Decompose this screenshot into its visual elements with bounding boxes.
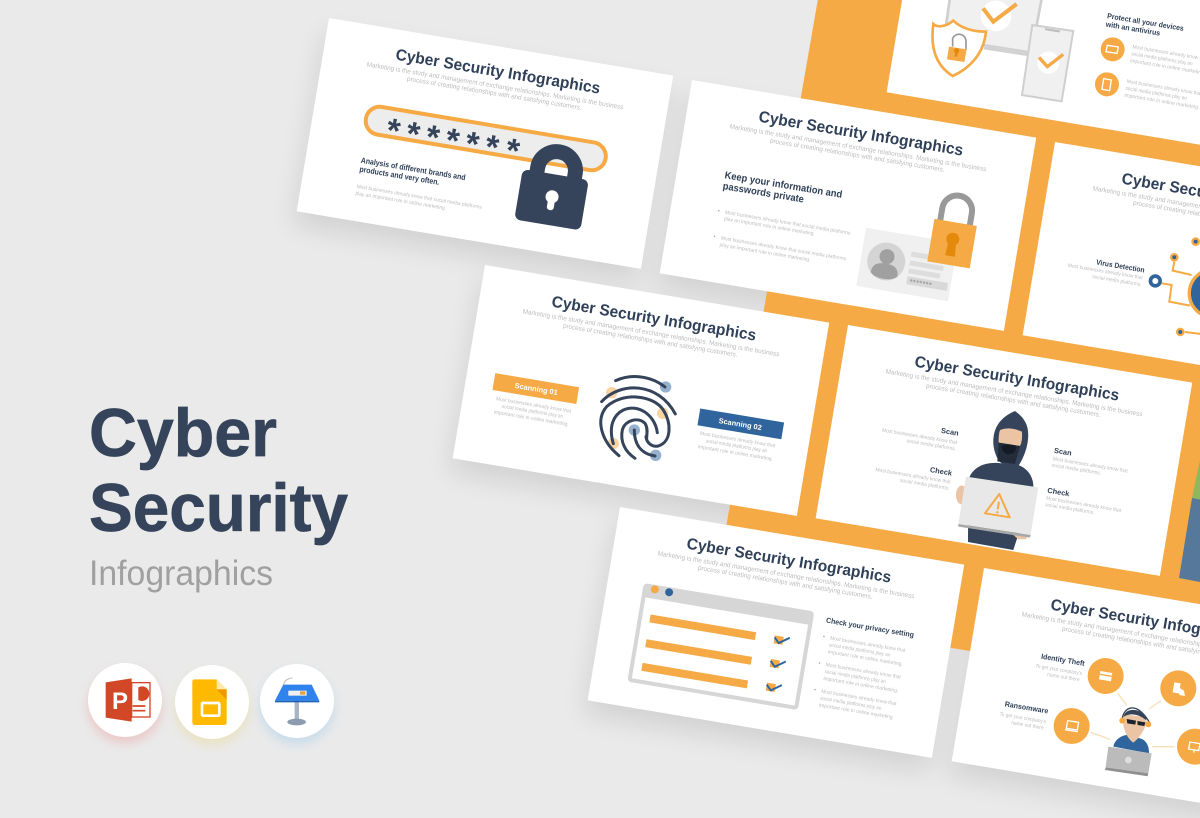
bullet list: Most businesses already know that — [830, 636, 906, 654]
text: ransomware: name out there. — [1011, 720, 1045, 732]
text: check right: Check — [1047, 486, 1071, 498]
bullet list: social media platforms play an — [820, 696, 882, 712]
text block: analysis — [355, 156, 487, 218]
diagram: threat circles around hacker — [1054, 658, 1200, 776]
text: identity theft — [1034, 651, 1086, 684]
icon: PowerPoint — [106, 678, 150, 722]
text: scan left — [880, 416, 960, 453]
icons: check marks — [766, 635, 790, 693]
icon: phone in hand — [1160, 670, 1196, 706]
text: scanning 02: important role in online marketing. — [697, 444, 773, 463]
icon: ID card — [856, 228, 958, 301]
password asterisks: * — [384, 111, 404, 151]
text: scan right: Most businesses already know that — [1052, 456, 1129, 475]
text: check left: Most businesses already know that — [875, 467, 951, 486]
text: check left: Check — [929, 465, 954, 478]
icon: monitor, phone and shield — [932, 0, 1073, 101]
bullet list: Most businesses already know that — [821, 689, 897, 707]
subtitle: process of creating relationships with and satisfying customers. — [406, 76, 582, 112]
browser window — [627, 583, 814, 710]
subtitle: Marketing is the study and management of exchange relationships. Marketing is the business — [657, 550, 915, 600]
text: scanning 02 — [697, 431, 776, 463]
icon: fingerprint — [601, 377, 675, 461]
text: scan right: Scan — [1053, 446, 1073, 458]
text: scanning 02: Most businesses already know that — [700, 431, 776, 449]
title: Cyber Security Infographics — [685, 536, 892, 587]
subtitle: process of creating relationships with and satisfying customers. — [925, 383, 1101, 419]
text: phone protection: social media platforms play an — [1125, 86, 1187, 102]
subtitle: Marketing is the study and management of exchange relationships. Marketing is the business — [366, 61, 624, 111]
text block: analysis: Analysis of different brands and — [360, 156, 466, 182]
text: phone protection: important role in online marketing. — [1124, 93, 1200, 111]
password asterisks: * — [443, 121, 463, 161]
heading: Cyber Security Infographics: Infographics — [89, 554, 273, 593]
heading: privacy setting: Check your privacy setting — [825, 616, 915, 639]
subtitle: Marketing is the study and management of exchange relationships. Marketing is the business — [729, 123, 987, 173]
heading: protect devices: with an antivirus — [1104, 19, 1161, 38]
text: check right: social media platforms. — [1045, 502, 1095, 516]
password asterisks: * — [503, 131, 523, 171]
icon: laptop — [1054, 708, 1090, 744]
slide: hacker — [816, 325, 1192, 576]
partial slide: photo at right edge — [1179, 460, 1200, 582]
icon: monitor — [1177, 729, 1200, 765]
text: scanning 01: important role in online marketing. — [493, 410, 569, 428]
text: laptop protection — [1130, 44, 1200, 77]
heading: Cyber Security Infographics: Security — [89, 470, 348, 546]
illustration: hooded hacker with laptop — [956, 411, 1038, 550]
icon: circuit diagram — [1149, 237, 1200, 336]
bullet list: important role in online marketing. — [827, 649, 903, 668]
label: scanning 02: Scanning 02 — [718, 416, 762, 432]
bullet list — [712, 209, 851, 269]
heading: keep private: passwords private — [722, 181, 805, 206]
illustration: hacker at laptop — [1105, 708, 1152, 776]
text: scanning 02: social media platforms play an — [705, 438, 768, 455]
text: scan left: Scan — [940, 426, 960, 438]
text: laptop protection: social media platforms play an — [1131, 51, 1193, 67]
text: identity theft: To get your company's — [1035, 663, 1083, 677]
text: scan right: social media platforms. — [1051, 463, 1101, 477]
text block: analysis: products and very often. — [359, 165, 440, 187]
text: scan left: social media platforms. — [906, 438, 956, 452]
bullet list: play an important role in online marketing. — [723, 216, 815, 237]
text: virus detection: Virus Detection — [1096, 258, 1146, 275]
heading: protect devices — [1104, 11, 1185, 41]
bullet list: important role in online marketing. — [823, 676, 899, 694]
bullet list: important role in online marketing. — [818, 703, 894, 721]
subtitle: process of creating relationships with and satisfying customers. — [562, 323, 738, 359]
icons: device circles — [1095, 37, 1125, 96]
icon: Keynote — [275, 678, 319, 725]
password asterisks: * — [403, 115, 423, 154]
password asterisks: * — [482, 128, 502, 168]
text: scanning 01: social media platforms play an — [501, 404, 564, 420]
text block: analysis: play an important role in online marketing. — [355, 191, 447, 212]
text: scan right — [1051, 446, 1130, 481]
slide: password lock — [297, 18, 673, 269]
subtitle: process of creating relationships with and satisfying customers. — [769, 138, 945, 174]
subtitle: Marketing is the study and management of exchange relationships. Marketing is the business — [522, 308, 780, 358]
bullet list: Most businesses already know that social media platforms — [720, 235, 847, 262]
title: Cyber Security Infographics — [394, 47, 601, 98]
label: scanning 01 — [492, 373, 579, 404]
text: ransomware — [998, 699, 1049, 732]
text: virus detection — [1066, 253, 1146, 288]
password asterisks — [384, 111, 523, 171]
title: Cyber Security Infographics — [550, 294, 757, 345]
bullet list — [811, 634, 906, 721]
text: check right: Most businesses already know that — [1046, 496, 1122, 514]
heading: protect devices: Protect all your devices — [1107, 11, 1185, 33]
icon: PowerPoint: P — [112, 688, 128, 715]
heading: keep private: Keep your information and — [724, 170, 843, 201]
slide: keep information private — [660, 80, 1036, 331]
text: virus detection: social media platforms. — [1092, 274, 1142, 288]
text: check right — [1045, 486, 1124, 521]
text: ransomware: Ransomware — [1004, 699, 1049, 716]
heading: Cyber Security Infographics: Cyber — [89, 395, 277, 471]
label: scanning 02 — [697, 408, 784, 439]
text: check left — [874, 456, 954, 492]
bullet list: social media platforms play an — [824, 669, 886, 685]
orange backdrop panel — [712, 0, 1200, 706]
slide: virus detection — [1023, 142, 1200, 393]
slide: antivirus — [887, 0, 1200, 150]
icon: orange padlock — [927, 192, 981, 268]
slide: fingerprint scanning — [453, 265, 829, 516]
text: scanning 01: Most businesses already know that — [496, 396, 572, 415]
text: scanning 01 — [493, 396, 572, 428]
label: scanning 01: Scanning 01 — [514, 381, 558, 397]
text: virus detection: Most businesses already know that — [1067, 263, 1144, 281]
password asterisks: * — [423, 118, 443, 158]
subtitle: process of creating relationships with and satisfying customers. — [697, 565, 873, 601]
title: Cyber Security Infographics — [913, 354, 1120, 405]
icon: ID card: ******* — [909, 279, 932, 289]
heading: Cyber Security Infographics — [89, 395, 348, 593]
text: check left: social media platforms. — [900, 478, 950, 492]
bullet list: social media platforms play an — [829, 642, 891, 659]
subtitle: Marketing is the study and management of exchange relationships. Marketing is the business — [885, 368, 1143, 418]
icon: Google Slides — [192, 679, 227, 725]
bullet list: play an important role in online marketing. — [719, 242, 811, 263]
icon: credit card — [1088, 658, 1124, 694]
text: identity theft: Identity Theft — [1040, 652, 1086, 668]
title: Cyber Security Infographics — [757, 109, 964, 160]
text: phone protection — [1124, 79, 1200, 111]
bullet list: Most businesses already know that social media platforms — [725, 210, 851, 237]
text: scan left: Most businesses already know that — [882, 428, 958, 446]
text: identity theft: name out there. — [1047, 672, 1081, 683]
text: ransomware: To get your company's — [999, 712, 1047, 725]
app icons row — [88, 663, 334, 745]
slide: privacy settings — [588, 507, 964, 758]
icon: padlock — [514, 146, 593, 230]
text block: analysis: Most businesses already know that social media platforms — [356, 184, 483, 211]
password asterisks: * — [462, 125, 483, 164]
password field — [364, 105, 608, 172]
slide: threats — [952, 568, 1200, 818]
bullet list: Most businesses already know that — [825, 662, 902, 681]
